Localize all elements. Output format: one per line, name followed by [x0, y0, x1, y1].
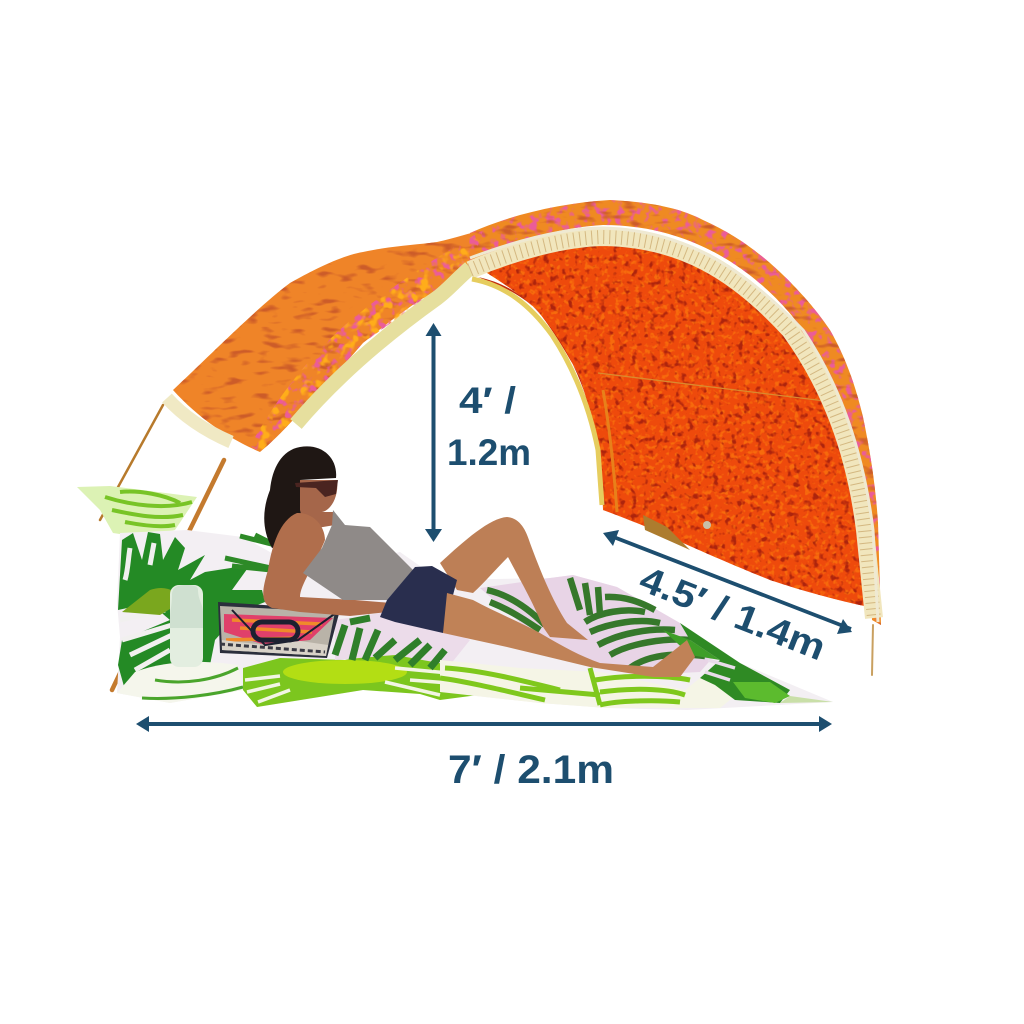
canopy fringe [167, 228, 878, 622]
woman reclining [263, 446, 695, 677]
hair [264, 446, 336, 548]
label: height line two: 1.2m [447, 432, 531, 473]
water bottle [170, 585, 203, 667]
lower right lime stripes [440, 660, 745, 708]
grey tank top [303, 510, 413, 600]
support poles [100, 405, 873, 690]
arrow: width [136, 716, 832, 732]
canopy inner back panel [470, 228, 869, 607]
label: width: 7′ / 2.1m [448, 748, 614, 792]
patterned beach blanket [77, 486, 833, 710]
bottom-left striped fold [117, 662, 243, 703]
blanket base sheet [117, 530, 833, 710]
lime palm [243, 652, 478, 707]
dimension: depth [603, 530, 852, 668]
canopy grommet [703, 521, 711, 529]
face and neck [300, 480, 337, 530]
raised leg [440, 517, 588, 640]
arrow: height [425, 323, 442, 542]
arrow: depth [603, 530, 852, 634]
canopy: shade awning [167, 200, 881, 625]
label: depth: 4.5′ / 1.4m [634, 558, 831, 668]
dimension: width [136, 716, 832, 792]
right dark green tip [680, 623, 833, 703]
canopy outer top strip [470, 200, 881, 625]
striped bag [218, 602, 340, 658]
canopy front panel [173, 230, 483, 452]
zebra palm leaf [480, 575, 720, 675]
label: height line one: 4′ / [459, 380, 516, 421]
canopy label patch [643, 515, 690, 550]
dimension: height [425, 323, 531, 542]
pink and green mid section [335, 610, 470, 668]
extended leg [443, 593, 695, 677]
sunglasses [295, 480, 338, 497]
arm [263, 513, 392, 616]
denim shorts [380, 566, 457, 633]
dark green palm [118, 532, 290, 690]
blanket back corner [77, 486, 197, 537]
